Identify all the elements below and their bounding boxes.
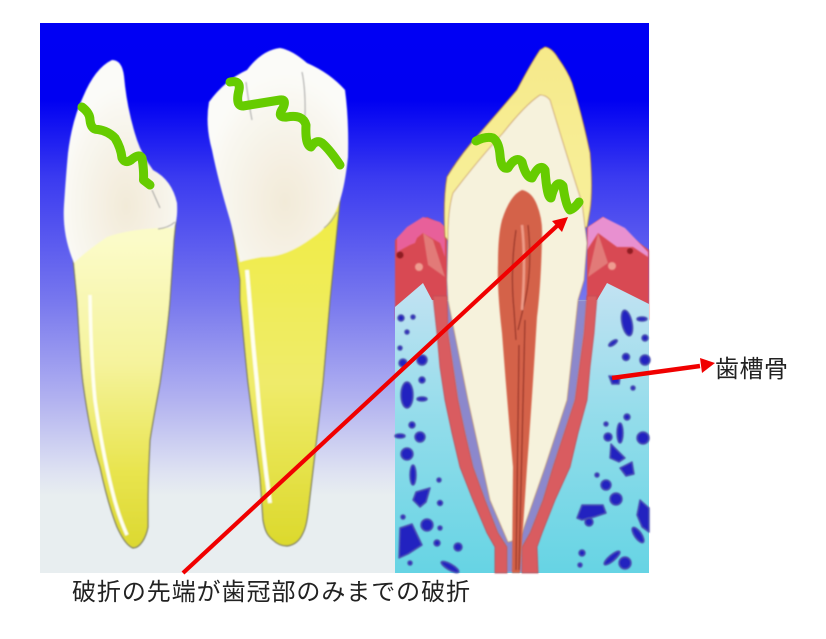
dentine [447,95,587,542]
left tooth highlight [90,295,127,535]
pulp [498,190,542,573]
fracture line: cross-section tooth [476,137,579,210]
fracture line: middle tooth [230,82,340,165]
background panel [40,23,649,573]
enamel [444,47,592,240]
middle tooth grooves [246,72,337,228]
middle tooth crown [208,48,348,262]
middle tooth [208,48,348,546]
left tooth crown [64,60,177,263]
cross-section of tooth and alveolar bone [395,47,650,575]
label: alveolar bone: 歯槽骨 [715,356,788,383]
periodontal ligament fibres [445,300,587,572]
bone marrow spaces [395,309,650,575]
left tooth [64,60,177,548]
arrow: to fracture tip [183,217,568,573]
middle tooth root [232,190,340,546]
periodontal ligament right band [522,296,597,573]
arrow: to alveolar bone [612,358,715,378]
gum base behind bone [395,217,649,320]
caption: 破折の先端が歯冠部のみまでの破折 [72,579,470,606]
middle tooth highlight [247,270,270,503]
left tooth groove [152,190,175,229]
right gum [587,217,648,277]
left gum [396,217,445,277]
alveolar bone [395,283,649,573]
left tooth root [73,215,176,548]
periodontal ligament left band [433,296,507,573]
fracture line: left tooth [82,107,150,185]
